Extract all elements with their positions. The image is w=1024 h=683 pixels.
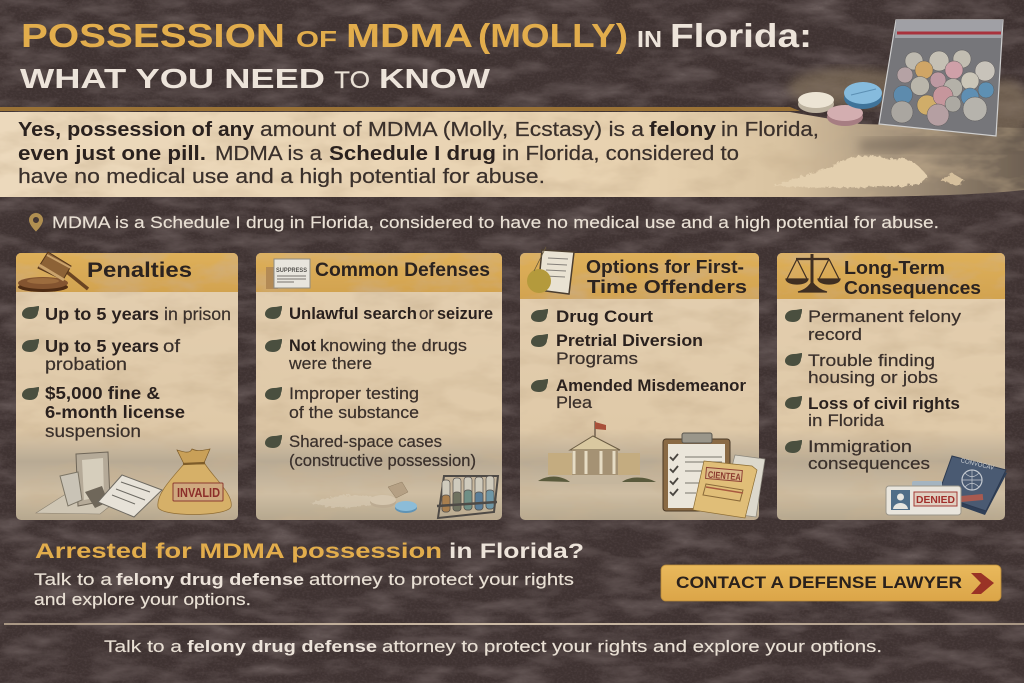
icon: map pin [29, 213, 43, 232]
list: Loss of civil rights [808, 394, 960, 413]
intro text: Yes, possession of [18, 118, 212, 141]
heading: Long-Term [844, 257, 945, 278]
list: record [808, 325, 862, 344]
body text: and explore your options. [34, 590, 251, 609]
list: Not [289, 336, 316, 355]
icon: gavel [18, 252, 88, 292]
intro text: Schedule I drug [329, 142, 496, 165]
list: Up to 5 years [45, 304, 159, 324]
panel: long-term consequences [777, 253, 1007, 520]
list: Shared-space cases [289, 432, 442, 451]
list: Pretrial Diversion [556, 331, 703, 350]
heading: Consequences [844, 277, 981, 298]
footer text: felony drug defense [187, 637, 377, 656]
list [22, 304, 231, 441]
list: Amended Misdemeanor [556, 376, 746, 395]
button: contact a defense lawyer: CONTACT A DEFENSE LAWYER [676, 574, 962, 592]
illustration: denied ID card [886, 481, 961, 515]
list: of the substance [289, 403, 419, 422]
title: TO [334, 67, 370, 94]
intro text: in Florida, [721, 118, 819, 141]
list: seizure [437, 304, 493, 323]
title [20, 17, 812, 94]
intro text: MDMA is a [215, 142, 323, 165]
intro text: amount of MDMA (Molly, Ecstasy) is a [260, 118, 645, 141]
title: WHAT YOU NEED [20, 63, 325, 94]
list: Permanent felony [808, 307, 962, 326]
intro text: in Florida, considered to [502, 142, 739, 165]
heading [35, 539, 584, 563]
intro text: even just one pill. [18, 142, 206, 165]
illustration: courthouse [538, 421, 656, 484]
list [531, 307, 746, 412]
call to action text [34, 539, 584, 609]
intro band [0, 68, 1024, 197]
title: POSSESSION [21, 17, 285, 54]
heading: in Florida? [449, 539, 584, 563]
illustration: denied ID card: DENIED [916, 494, 955, 506]
panel: penalties [16, 252, 238, 520]
illustration: zip bag of pills [879, 20, 1003, 136]
intro text: have no medical use and a high potential for abuse. [18, 165, 545, 188]
title: IN [637, 26, 662, 52]
body text [34, 570, 574, 609]
list: housing or jobs [808, 368, 938, 387]
footer text [104, 637, 882, 656]
footer text: attorney to protect your rights and explore your options. [382, 637, 882, 656]
heading: Common Defenses [315, 260, 490, 281]
list: (constructive possession) [289, 452, 476, 470]
heading [844, 257, 981, 298]
illustration: pills and powder [772, 20, 1003, 188]
icon: chevron arrow [971, 573, 994, 594]
illustration: money bag marked invalid: INVALID [177, 486, 220, 500]
intro text: any [218, 118, 255, 141]
illustration: client folder [693, 455, 765, 518]
list: consequences [808, 454, 930, 473]
footer text: Talk to a [104, 637, 183, 656]
list: Programs [556, 349, 638, 368]
icon: scales of justice [786, 254, 840, 292]
intro text: felony [649, 118, 717, 141]
illustration: checklist clipboard [663, 433, 730, 511]
list: Drug Court [556, 307, 653, 326]
divider line [4, 623, 1024, 625]
list: suspension [45, 421, 141, 441]
list: knowing the drugs [320, 336, 467, 355]
list: Plea [556, 393, 593, 412]
illustration: passport [938, 456, 1007, 515]
list: in Florida [808, 411, 885, 430]
title: MDMA [346, 17, 473, 54]
illustration: passport: CONVOCAV [960, 457, 995, 472]
title: OF [296, 26, 337, 52]
list: Immigration [808, 437, 912, 456]
illustration: suspended licence papers [36, 452, 162, 517]
list: Up to 5 years [45, 336, 159, 356]
title: (MOLLY) [478, 17, 628, 54]
heading: Penalties [87, 259, 192, 282]
list [265, 304, 493, 470]
list: were there [288, 354, 372, 373]
icon: suppressed document: SUPPRESS [276, 267, 308, 274]
body text: attorney to protect your rights [309, 570, 574, 589]
heading: Time Offenders [587, 276, 747, 297]
list [785, 307, 962, 473]
icon: suppressed document [266, 259, 310, 289]
panel: common defenses [256, 253, 502, 520]
illustration: client folder: CIENTEA [707, 470, 741, 483]
list: or [419, 304, 434, 323]
list: Trouble finding [808, 351, 935, 370]
button: contact a defense lawyer [661, 565, 1001, 601]
list: $5,000 fine & [45, 383, 160, 403]
title: Florida: [670, 17, 812, 54]
location note: MDMA is a Schedule I drug in Florida, considered to have no medical use and a high potential for abuse. [52, 214, 939, 232]
list: of [163, 336, 180, 356]
heading: Options for First- [586, 256, 744, 277]
list: 6-month license [45, 402, 185, 422]
body text: felony drug defense [116, 570, 304, 589]
panel: first-time options [520, 247, 765, 520]
list: probation [45, 354, 127, 374]
icon: clipboard and stopwatch [527, 247, 574, 294]
illustration: money bag marked invalid [158, 449, 231, 514]
list: Improper testing [289, 384, 419, 403]
illustration: pills, powder and test tubes [310, 476, 498, 518]
intro text [18, 118, 819, 188]
list: in prison [164, 304, 231, 324]
body text: Talk to a [34, 570, 113, 589]
heading [586, 256, 747, 297]
heading: Arrested for MDMA possession [35, 539, 442, 563]
list: Unlawful search [289, 304, 417, 323]
title: KNOW [379, 63, 491, 94]
